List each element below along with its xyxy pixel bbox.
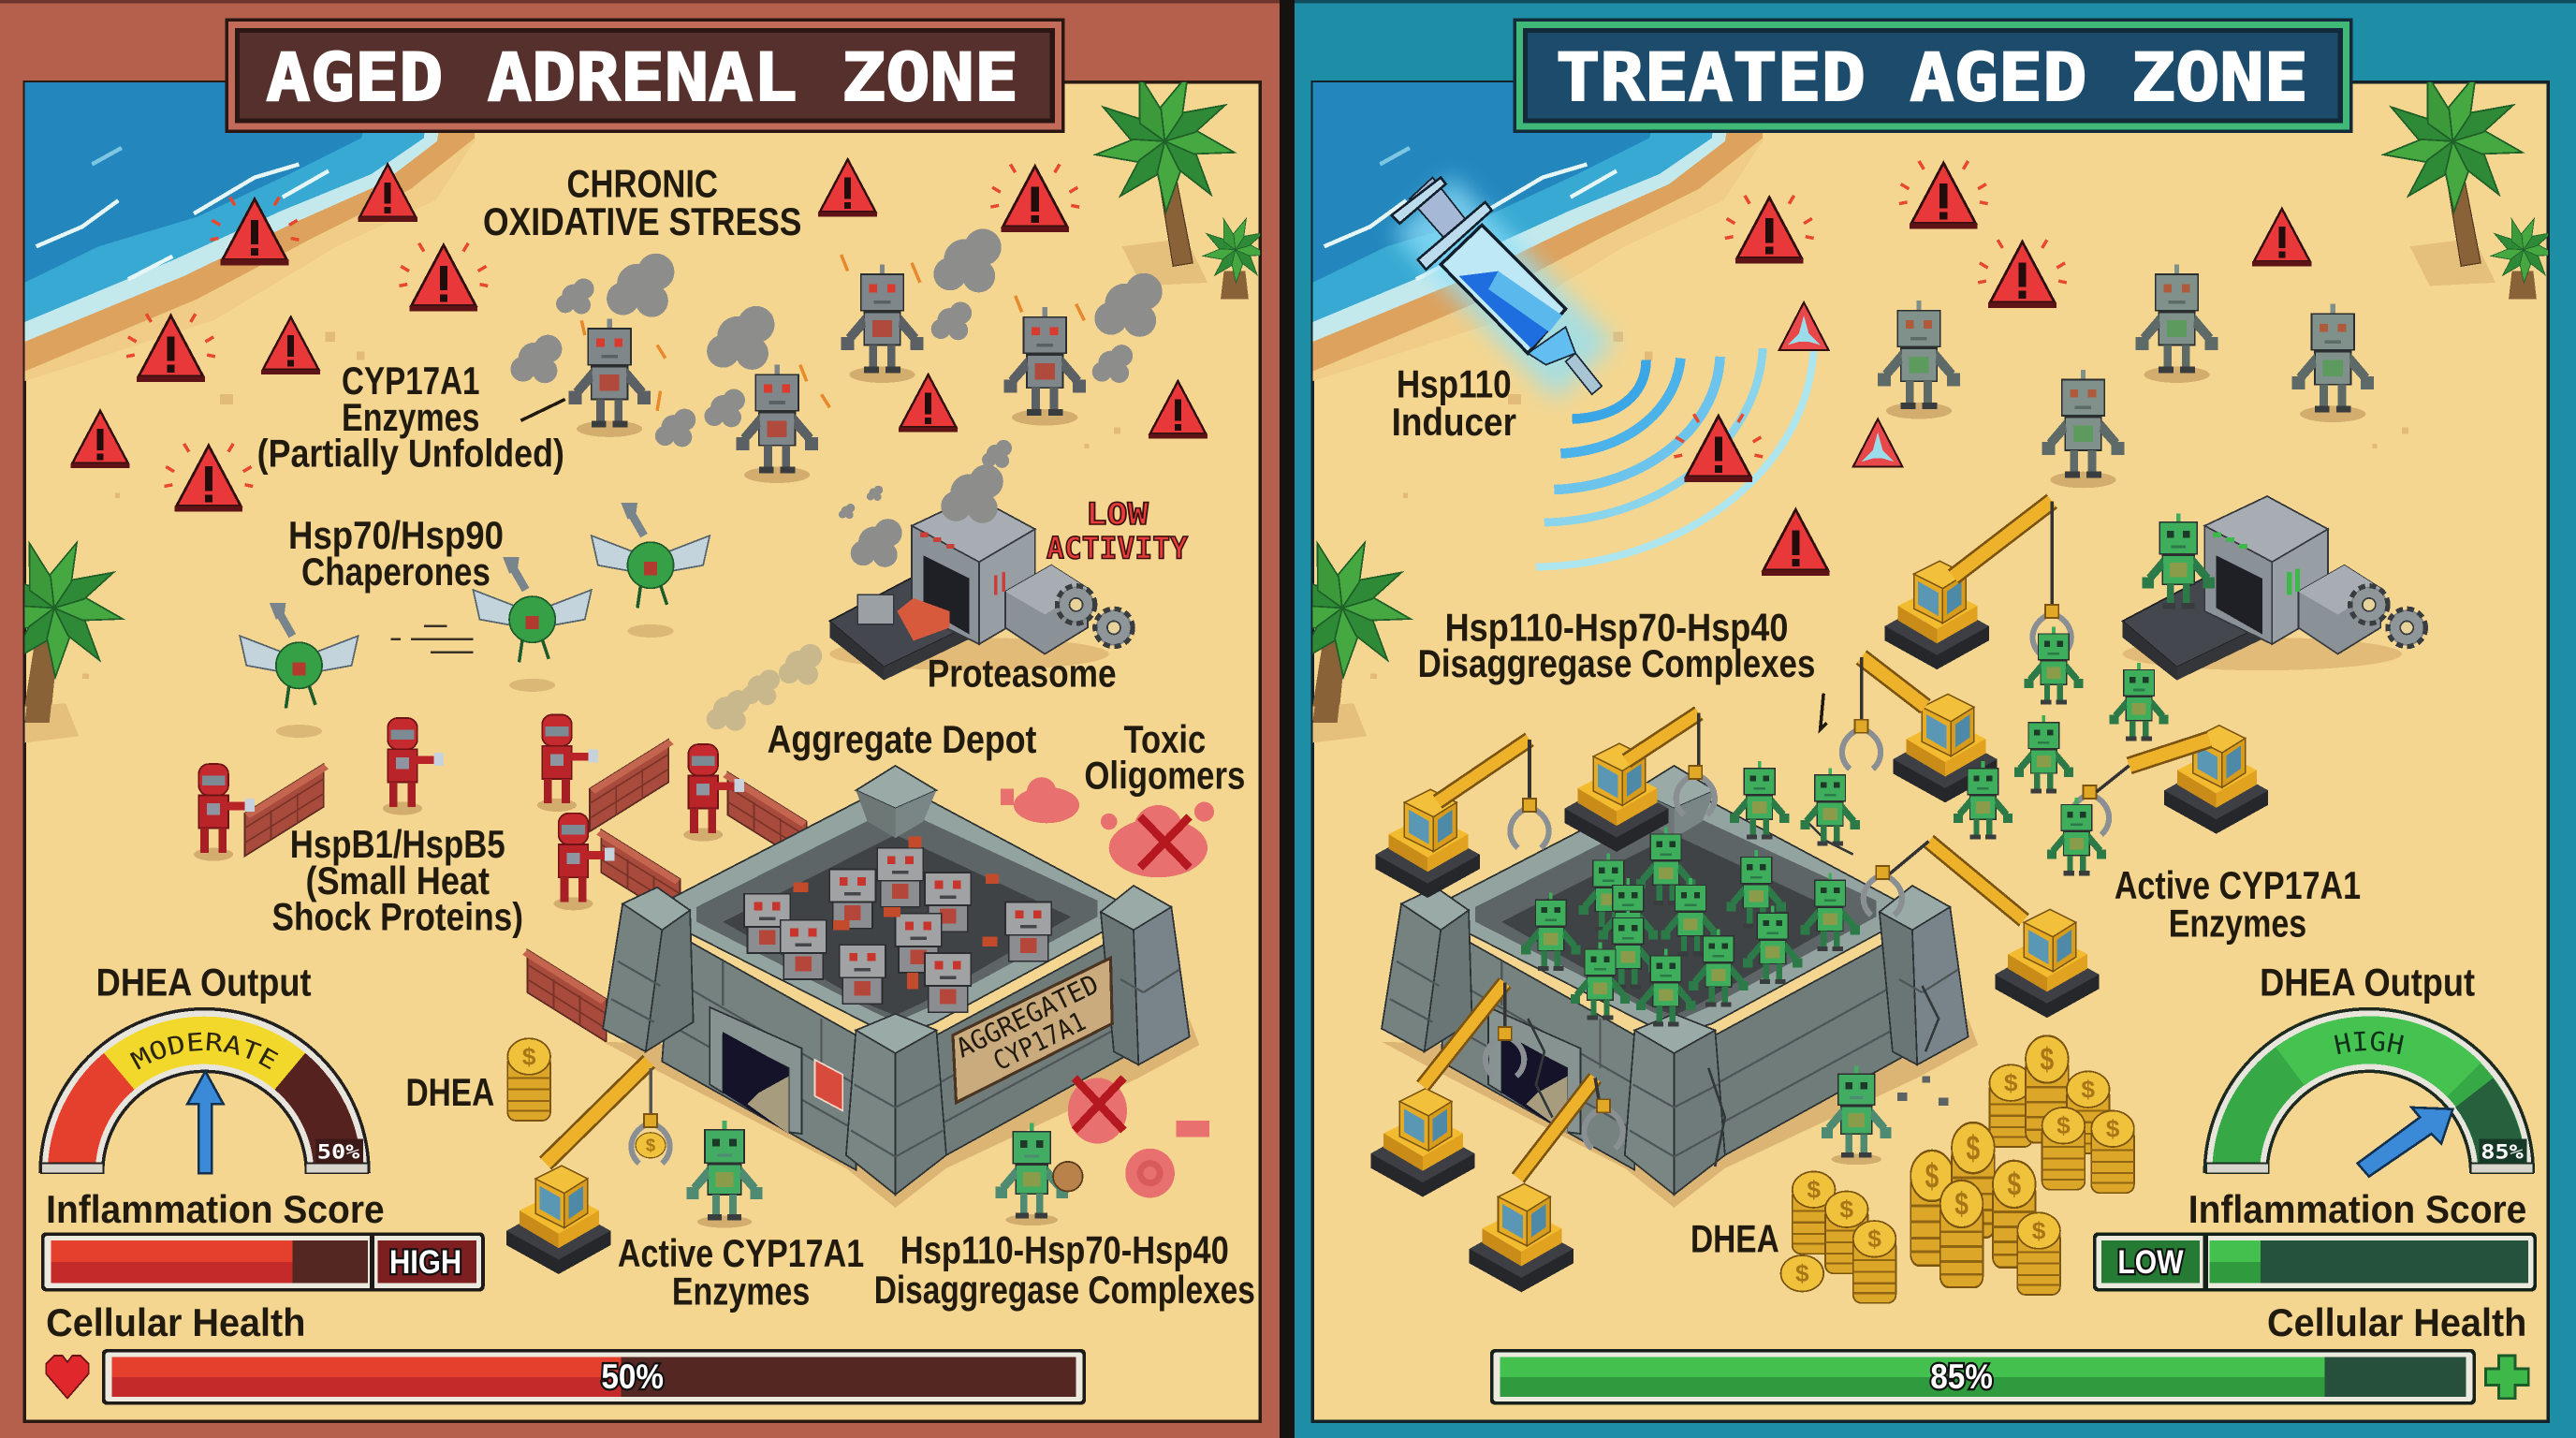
inflammation bar: high: HIGH xyxy=(389,1244,461,1281)
red X marks xyxy=(1075,816,1190,1131)
label: proteasome: Proteasome xyxy=(928,652,1117,696)
misfolded CYP17A1 robots xyxy=(568,265,1086,483)
dissolving warning triangles xyxy=(1779,302,1902,466)
sign: aggregated CYP17A1: CYP17A1 xyxy=(988,1005,1090,1077)
icon: Hsp110 inducer syringe xyxy=(1392,178,1602,394)
label: DHEA output: DHEA Output xyxy=(96,961,312,1005)
disaggregase cranes xyxy=(1370,501,2268,1292)
active CYP17A1 robots xyxy=(687,1121,1083,1228)
title banner xyxy=(225,18,1064,133)
icon: green plus xyxy=(2485,1356,2528,1399)
label: CYP17A1 enzymes partially unfolded: Enzymes xyxy=(342,395,479,439)
inflammation bar: low xyxy=(2093,1232,2537,1292)
crane with claw xyxy=(506,1062,670,1274)
beach scenery: ocean and palms xyxy=(1273,69,2557,742)
label: inflammation score: Inflammation Score xyxy=(2188,1187,2526,1231)
DHEA gauge: moderate 50%: 50% xyxy=(317,1139,360,1163)
pointer line xyxy=(520,399,565,420)
low activity tag xyxy=(1046,498,1188,566)
label: Hsp110 inducer: Hsp110 xyxy=(1397,362,1512,406)
label: inflammation score: Inflammation Score xyxy=(46,1187,385,1231)
proteasome xyxy=(829,440,1132,681)
label: cellular health: Cellular Health xyxy=(2267,1300,2526,1344)
label: Hsp110 inducer: Inducer xyxy=(1392,400,1516,444)
label: disaggregase complexes: Hsp110-Hsp70-Hsp40 xyxy=(1445,605,1788,649)
label: aggregate depot: Aggregate Depot xyxy=(768,717,1036,761)
label: active enzymes: Active CYP17A1 xyxy=(2115,863,2361,907)
title banner xyxy=(1513,18,2352,133)
DHEA gauge: high 85%: HIGH xyxy=(2334,1032,2404,1054)
label: cellular health: Cellular Health xyxy=(46,1300,305,1344)
freed active CYP17A1 robots xyxy=(1730,626,2169,1165)
cellular health bar: 50%: 50% xyxy=(601,1357,664,1396)
label: disaggregase complexes: Disaggregase Complexes xyxy=(874,1268,1255,1312)
DHEA gauge: moderate 50% xyxy=(38,1007,371,1174)
label: DHEA output: DHEA Output xyxy=(2260,961,2475,1005)
DHEA gauge: high 85%: 85% xyxy=(2481,1139,2524,1163)
warning tag on wall xyxy=(815,1060,842,1110)
warning triangles: oxidative stress xyxy=(70,159,1208,512)
small heat shock protein workers and brick walls xyxy=(194,714,807,1042)
panel: treated aged zone xyxy=(1295,0,2576,1438)
inflammation bar: low: LOW xyxy=(2117,1244,2184,1281)
cellular health bar: 85% xyxy=(1490,1349,2476,1405)
label: active enzymes: Enzymes xyxy=(2169,901,2306,945)
smoke clouds xyxy=(510,228,1163,447)
pointer arrow xyxy=(1821,694,1827,729)
label: small heat shock proteins: Shock Proteins) xyxy=(271,894,523,938)
inflammation bar: high xyxy=(41,1232,485,1292)
proteasome active xyxy=(2123,496,2425,681)
label: chaperones: Chaperones xyxy=(301,550,490,594)
healing pulse waves xyxy=(1536,348,1814,567)
aggregate depot xyxy=(603,766,1199,1208)
label: disaggregase complexes: Disaggregase Complexes xyxy=(1418,641,1815,685)
title banner: TREATED AGED ZONE xyxy=(1556,39,2308,116)
title banner: AGED ADRENAL ZONE xyxy=(266,39,1018,116)
aggregate depot opening xyxy=(1382,766,1978,1208)
label: disaggregase complexes: Hsp110-Hsp70-Hsp40 xyxy=(900,1228,1229,1272)
label: CYP17A1 enzymes partially unfolded: (Partially Unfolded) xyxy=(257,431,564,475)
aggregated robots inside depot xyxy=(744,836,1051,1012)
DHEA gauge: moderate 50%: MODERATE xyxy=(129,1032,279,1069)
label: DHEA: DHEA xyxy=(406,1070,494,1114)
label: DHEA: DHEA xyxy=(1690,1216,1779,1260)
toxic oligomer blobs xyxy=(1001,777,1214,1197)
sign: aggregated CYP17A1 xyxy=(951,958,1112,1103)
label: chaperones: Hsp70/Hsp90 xyxy=(288,513,504,557)
cellular health bar: 50% xyxy=(102,1349,1086,1405)
label: small heat shock proteins: HspB1/HspB5 xyxy=(290,822,505,866)
green robot on conveyor xyxy=(2143,513,2215,609)
beach scenery: ocean and palms xyxy=(0,69,1269,742)
low activity tag: ACTIVITY xyxy=(1046,533,1188,566)
label: active enzymes: Enzymes xyxy=(672,1269,810,1313)
sign: aggregated CYP17A1: AGGREGATED xyxy=(951,968,1104,1064)
label: toxic oligomers: Oligomers xyxy=(1084,753,1245,797)
DHEA coins xyxy=(507,1038,550,1121)
DHEA gauge: high 85% xyxy=(2203,1007,2535,1178)
DHEA coin piles xyxy=(1781,1035,2134,1303)
smoke trail xyxy=(707,644,822,731)
Hsp70/Hsp90 chaperone flies xyxy=(240,503,710,738)
label: toxic oligomers: Toxic xyxy=(1123,717,1206,761)
cracks in depot walls xyxy=(1528,822,1939,1167)
warning triangles: reduced stress xyxy=(1674,161,2311,576)
panel: aged adrenal zone xyxy=(0,0,1318,1438)
icon: heart xyxy=(46,1356,89,1399)
recovering robots xyxy=(1878,265,2374,488)
low activity tag: LOW xyxy=(1086,498,1149,532)
label: active enzymes: Active CYP17A1 xyxy=(618,1231,864,1275)
sparks around robots xyxy=(581,255,1084,411)
label: chronic oxidative stress: OXIDATIVE STRESS xyxy=(483,199,801,243)
label: small heat shock proteins: (Small Heat xyxy=(305,858,490,902)
refolded green robots inside depot xyxy=(1521,827,1860,1027)
label: chronic oxidative stress: CHRONIC xyxy=(567,162,718,206)
label: CYP17A1 enzymes partially unfolded: CYP17A1 xyxy=(342,359,479,403)
cellular health bar: 85%: 85% xyxy=(1930,1357,1993,1396)
